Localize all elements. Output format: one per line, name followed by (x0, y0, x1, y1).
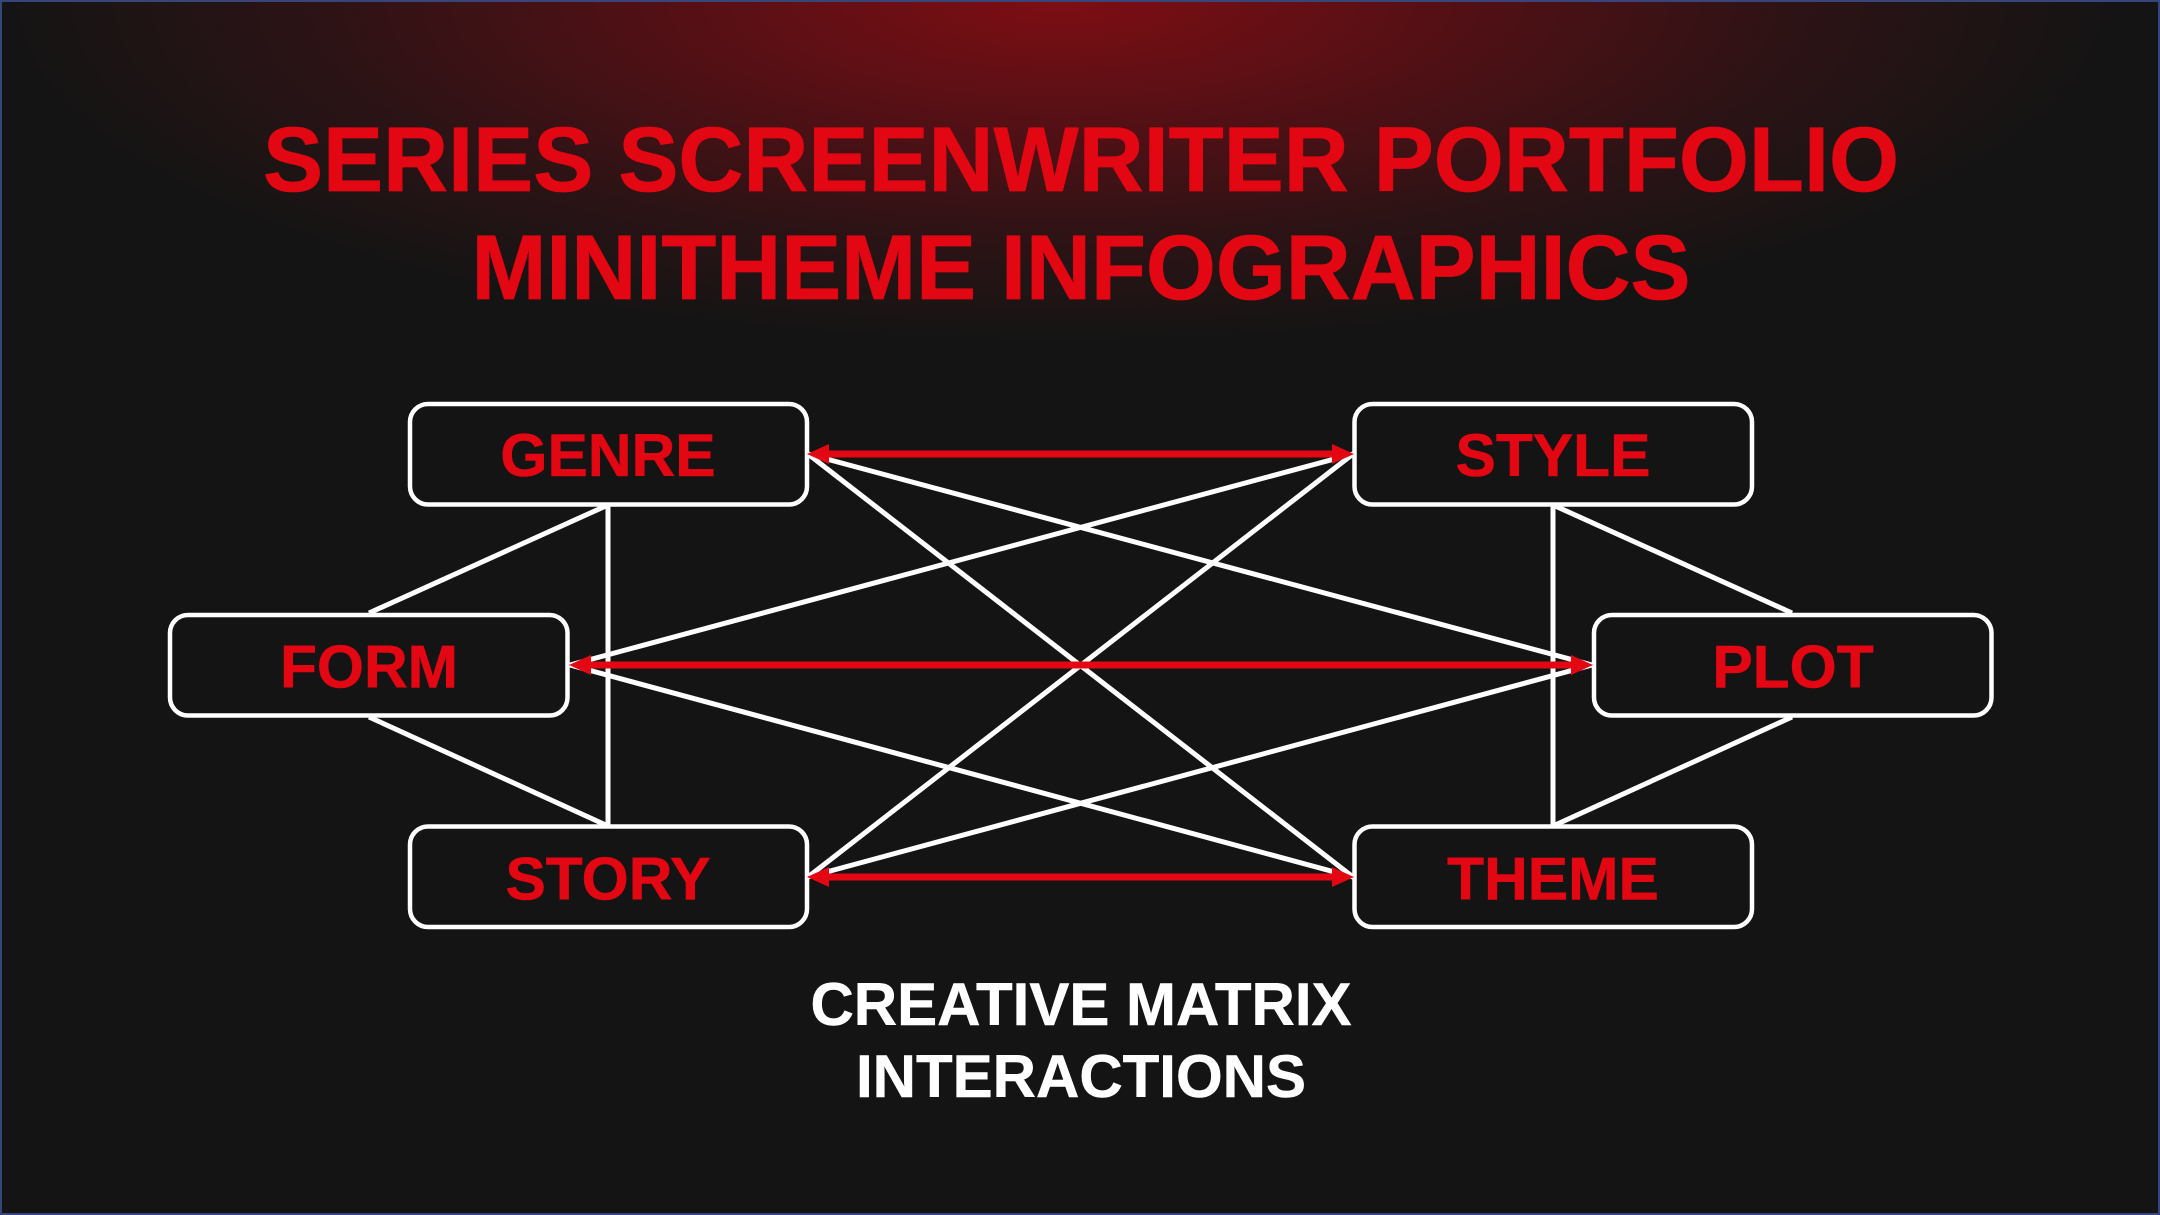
box: STORY: STORY (505, 844, 711, 912)
caption: INTERACTIONS (856, 1043, 1306, 1110)
arrow: GENRE to STYLE (807, 444, 1354, 464)
title (263, 109, 1899, 319)
caption (810, 971, 1352, 1110)
caption: CREATIVE MATRIX (810, 971, 1352, 1038)
box: THEME (1354, 826, 1752, 927)
box: PLOT: PLOT (1712, 632, 1874, 700)
box: FORM: FORM (280, 632, 458, 700)
box: GENRE (410, 404, 807, 504)
box: GENRE: GENRE (500, 421, 716, 489)
connector lines: white interactions (369, 454, 1792, 877)
box: STORY (410, 826, 807, 927)
box: FORM (170, 615, 568, 716)
title: SERIES SCREENWRITER PORTFOLIO (263, 109, 1899, 211)
title: MINITHEME INFOGRAPHICS (472, 217, 1690, 319)
box: STYLE (1354, 404, 1752, 504)
box: PLOT (1594, 615, 1992, 716)
arrow: FORM to PLOT (569, 655, 1593, 675)
arrow: STORY to THEME (807, 867, 1354, 887)
box: STYLE: STYLE (1456, 421, 1650, 489)
box: THEME: THEME (1447, 844, 1659, 912)
